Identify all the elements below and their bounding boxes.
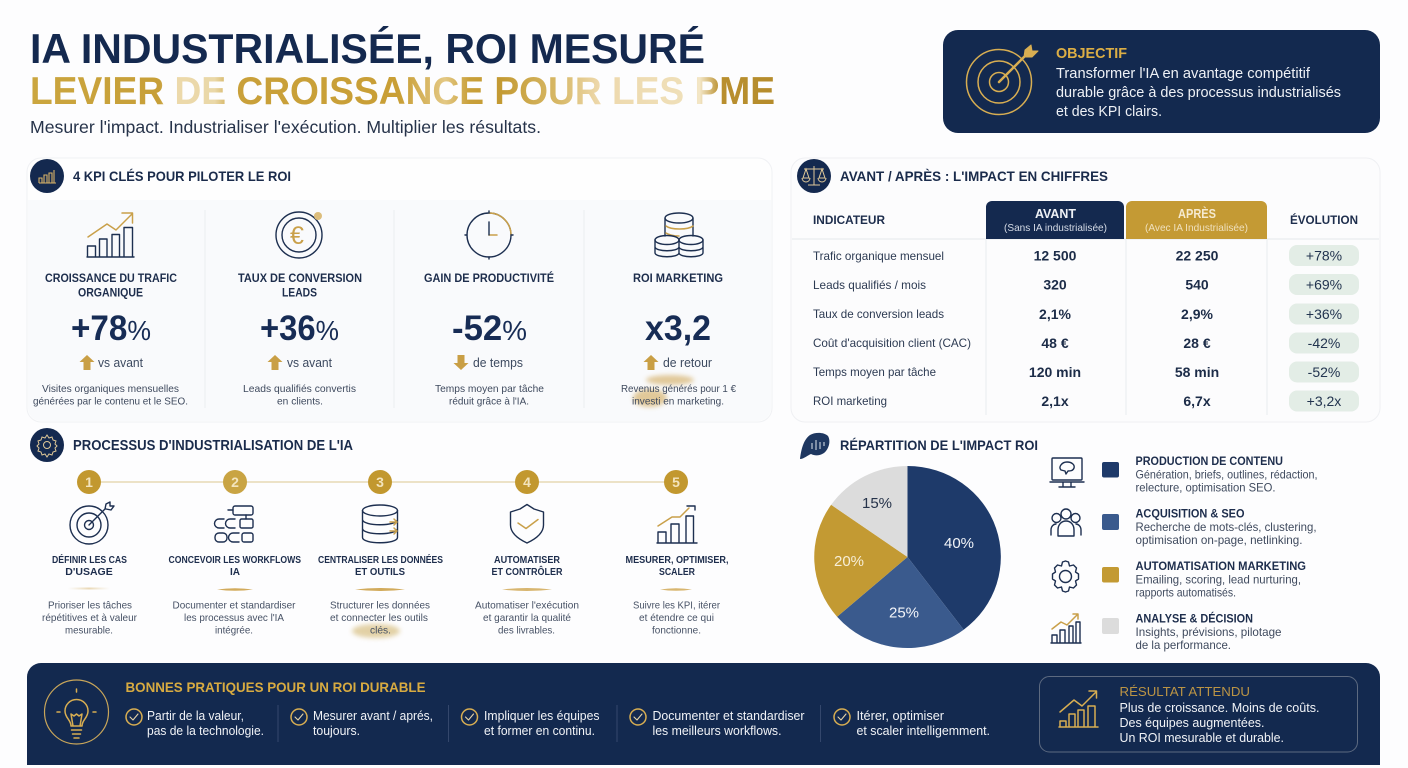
heading: processus: PROCESSUS D'INDUSTRIALISATION DE L'IA	[73, 438, 353, 454]
legend: automatisation: rapports automatisés.	[1136, 586, 1236, 600]
step 3: ET OUTILS	[355, 566, 405, 578]
step 1	[42, 470, 137, 636]
callout: résultat attendu: RÉSULTAT ATTENDU	[1120, 684, 1250, 699]
KPI: ROI	[621, 213, 736, 408]
subtitle: Mesurer l'impact. Industrialiser l'exécution. Multiplier les résultats.	[30, 117, 541, 137]
table header: (Sans IA industrialisée)	[1004, 222, 1107, 234]
icon: arrow up	[644, 355, 658, 370]
gold smear	[352, 624, 400, 638]
legend: analyse: ANALYSE & DÉCISION	[1136, 610, 1253, 626]
heading: répartition: RÉPARTITION DE L'IMPACT ROI	[840, 437, 1038, 453]
row: CAC: 48 €	[1041, 335, 1069, 351]
row: trafic: +78%	[1306, 248, 1342, 264]
practice 1	[126, 708, 264, 738]
KPI: croissance: vs avant	[98, 355, 143, 370]
step 1: Prioriser les tâches	[48, 600, 132, 612]
KPI: productivité: Temps moyen par tâche	[435, 383, 544, 395]
step 2: IA	[230, 566, 240, 578]
row: CAC	[813, 332, 1359, 354]
icon: scales	[797, 159, 831, 193]
icon: euro target	[276, 212, 322, 258]
step 2	[168, 470, 301, 636]
row: conversion: 2,1%	[1039, 306, 1072, 322]
timeline line	[89, 481, 676, 483]
table header: ÉVOLUTION	[1290, 212, 1358, 227]
step 5: fonctionne.	[652, 624, 701, 636]
step 1: 1	[85, 474, 93, 490]
practice 3: et former en continu.	[484, 723, 595, 738]
icon: répartition header	[800, 433, 829, 459]
icon: workflow	[214, 506, 253, 542]
KPI: ROI: de retour	[663, 355, 713, 370]
step 4: 4	[523, 474, 531, 490]
step 2: 2	[231, 474, 239, 490]
step 1: mesurable.	[65, 624, 113, 636]
table header: APRÈS	[1178, 206, 1216, 221]
pie chart: 20%	[834, 553, 864, 570]
row: ROI: +3,2x	[1307, 393, 1341, 409]
callout: résultat attendu	[1040, 676, 1358, 752]
step 5	[626, 470, 729, 636]
step 5: et étendre ce qui	[639, 612, 714, 624]
legend: acquisition: Recherche de mots-clés, clustering,	[1136, 520, 1316, 534]
row: leads: +69%	[1306, 276, 1342, 292]
practice 1: pas de la technologie.	[147, 723, 264, 738]
icon: light bulb	[44, 680, 108, 744]
icon: monitor	[1050, 458, 1084, 487]
step 4: ET CONTRÔLER	[492, 565, 563, 578]
icon: arrow down	[454, 355, 468, 370]
icon: arrow up	[80, 355, 94, 370]
callout: résultat attendu: Un ROI mesurable et durable.	[1120, 730, 1284, 745]
icon: euro target: €	[290, 222, 304, 250]
KPI: productivité: de temps	[473, 355, 523, 370]
KPI: conversion: en clients.	[277, 396, 323, 408]
row: leads	[813, 274, 1359, 295]
row: conversion: +36%	[1306, 306, 1342, 322]
step 3: Structurer les données	[330, 600, 430, 612]
pie chart: 40%	[944, 535, 974, 552]
panel: bonnes pratiques	[27, 663, 1380, 765]
step 4: Automatiser l'exécution	[475, 600, 579, 612]
row: temps: 120 min	[1029, 364, 1081, 380]
row: conversion	[813, 304, 1359, 324]
step 3: 3	[376, 474, 384, 490]
heading: bonnes pratiques: BONNES PRATIQUES POUR UN ROI DURABLE	[126, 679, 426, 695]
row: temps: -52%	[1308, 364, 1340, 380]
panel: avant / après	[791, 158, 1380, 422]
row: trafic: 22 250	[1176, 248, 1219, 264]
heading: avant après: AVANT / APRÈS : L'IMPACT EN CHIFFRES	[840, 168, 1108, 184]
heading: KPI: 4 KPI CLÉS POUR PILOTER LE ROI	[73, 168, 291, 184]
icon: arrow up	[268, 355, 282, 370]
gold smear	[633, 375, 694, 407]
row: leads: 320	[1043, 276, 1067, 292]
legend: automatisation	[1052, 559, 1306, 600]
legend: analyse: de la performance.	[1136, 638, 1231, 652]
KPI: productivité: -52%	[452, 309, 527, 348]
row: ROI: ROI marketing	[813, 394, 887, 408]
step 5: SCALER	[659, 566, 695, 578]
practice 2	[291, 708, 433, 738]
icon: chart	[657, 506, 697, 543]
table header	[813, 201, 1358, 239]
row: trafic: 12 500	[1034, 248, 1077, 264]
panel: objectif	[943, 30, 1380, 133]
step 1: DÉFINIR LES CAS	[52, 553, 127, 566]
practice 5	[834, 708, 990, 738]
step 3: CENTRALISER LES DONNÉES	[318, 553, 443, 566]
icon: target	[70, 502, 114, 544]
step 2: les processus avec l'IA	[184, 612, 284, 624]
practice 3	[462, 708, 600, 738]
legend: analyse: Insights, prévisions, pilotage	[1136, 625, 1282, 639]
step 1: D'USAGE	[65, 566, 113, 578]
table header: AVANT	[1035, 206, 1076, 221]
row: ROI: 6,7x	[1183, 393, 1211, 409]
icon: people	[1051, 509, 1081, 536]
step 2: Documenter et standardiser	[172, 600, 296, 612]
row: ROI	[813, 390, 1359, 412]
objectif text: Transformer l'IA en avantage compétitif	[1056, 65, 1311, 82]
practice 1: Partir de la valeur,	[147, 708, 244, 723]
icon: analytics	[1051, 614, 1081, 643]
KPI: ROI: x3,2	[645, 309, 711, 348]
legend: production	[1050, 454, 1318, 494]
step 2: CONCEVOIR LES WORKFLOWS	[168, 554, 301, 566]
legend: acquisition: ACQUISITION & SEO	[1136, 506, 1244, 520]
KPI: croissance: CROISSANCE DU TRAFIC	[45, 271, 177, 285]
icon: growth chart	[87, 213, 134, 257]
pie chart: 15%	[862, 495, 892, 512]
legend: production: relecture, optimisation SEO.	[1136, 480, 1276, 494]
panel: 4 KPI	[27, 158, 772, 422]
legend: automatisation: Emailing, scoring, lead nurturing,	[1136, 572, 1301, 586]
KPI: ROI: investi en marketing.	[632, 396, 724, 408]
KPI: conversion: TAUX DE CONVERSION	[238, 271, 362, 285]
KPI: productivité: GAIN DE PRODUCTIVITÉ	[424, 270, 554, 285]
practice 5: Itérer, optimiser	[856, 708, 945, 723]
KPI: croissance: +78%	[71, 309, 151, 348]
row: leads: 540	[1185, 276, 1209, 292]
pie chart	[814, 466, 1001, 648]
objectif text	[1056, 65, 1341, 120]
KPI: ROI: ROI MARKETING	[633, 271, 723, 285]
icon: KPI header	[30, 159, 64, 193]
icon: target	[966, 45, 1038, 114]
practice 2: toujours.	[313, 723, 360, 738]
icon: database	[362, 505, 398, 543]
panel: répartition	[800, 433, 1318, 652]
step 4: AUTOMATISER	[494, 554, 560, 566]
KPI: conversion: vs avant	[287, 355, 332, 370]
icon: clock	[465, 211, 513, 259]
title	[30, 25, 775, 113]
row: temps	[813, 362, 1359, 382]
row: conversion: Taux de conversion leads	[813, 307, 944, 321]
title: IA INDUSTRIALISÉE, ROI MESURÉ	[30, 25, 705, 72]
KPI: conversion: +36%	[260, 309, 339, 348]
legend: production: PRODUCTION DE CONTENU	[1136, 454, 1283, 468]
step 4: des livrables.	[498, 624, 555, 636]
objectif text: et des KPI clairs.	[1056, 103, 1162, 120]
step 4: et garantir la qualité	[483, 612, 571, 624]
KPI: productivité: réduit grâce à l'IA.	[449, 396, 529, 408]
row: trafic: Trafic organique mensuel	[813, 249, 944, 263]
step 5: 5	[672, 474, 680, 490]
legend: analyse	[1051, 610, 1282, 652]
KPI: conversion: Leads qualifiés convertis	[243, 383, 356, 395]
row: temps: Temps moyen par tâche	[813, 365, 936, 379]
KPI: croissance: générées par le contenu et le SEO.	[33, 396, 188, 408]
KPI: conversion: LEADS	[282, 286, 317, 300]
step 5: Suivre les KPI, itérer	[633, 600, 720, 612]
table header: INDICATEUR	[813, 213, 885, 227]
KPI: productivité	[424, 211, 554, 408]
practice 3: Impliquer les équipes	[484, 708, 600, 723]
KPI: croissance	[33, 213, 188, 408]
legend: production: Génération, briefs, outlines, rédaction,	[1136, 468, 1318, 482]
table header: (Avec IA Industrialisée)	[1145, 222, 1248, 234]
step 2: intégrée.	[215, 624, 253, 636]
KPI: croissance: Visites organiques mensuelles	[42, 383, 179, 395]
row: ROI: 2,1x	[1041, 393, 1069, 409]
row: conversion: 2,9%	[1181, 306, 1214, 322]
legend: acquisition	[1051, 506, 1316, 547]
step 3	[318, 470, 443, 638]
row: CAC: Coût d'acquisition client (CAC)	[813, 336, 971, 350]
KPI: croissance: ORGANIQUE	[78, 286, 143, 300]
icon: gear header	[30, 428, 64, 462]
objectif label: OBJECTIF	[1056, 45, 1127, 62]
practice 2: Mesurer avant / aprés,	[313, 708, 433, 723]
objectif text: durable grâce à des processus industrialisés	[1056, 84, 1341, 101]
pie chart: 25%	[889, 604, 919, 622]
step 3: et connecter les outils	[330, 612, 428, 624]
step 5: MESURER, OPTIMISER,	[626, 554, 729, 566]
callout: résultat attendu: Des équipes augmentées.	[1120, 715, 1264, 730]
legend: acquisition: optimisation on-page, netlinking.	[1136, 533, 1302, 547]
practice 4: Documenter et standardiser	[652, 708, 805, 723]
icon: gear	[1052, 561, 1078, 592]
icon: coins	[655, 213, 703, 257]
practice 4: les meilleurs workflows.	[652, 723, 782, 738]
row: CAC: 28 €	[1183, 335, 1211, 351]
icon: shield	[510, 504, 544, 543]
row: leads: Leads qualifiés / mois	[813, 278, 926, 292]
step 3: clés.	[370, 624, 391, 636]
row: CAC: -42%	[1308, 335, 1340, 351]
KPI: ROI: Revenus générés pour 1 €	[621, 383, 736, 395]
legend: automatisation: AUTOMATISATION MARKETING	[1136, 559, 1306, 573]
practice 5: et scaler intelligemment.	[856, 723, 990, 738]
step 4	[475, 470, 579, 636]
panel: processus	[30, 428, 729, 638]
practice 4	[630, 708, 805, 738]
KPI: conversion	[238, 212, 362, 408]
callout: résultat attendu: Plus de croissance. Moins de coûts.	[1120, 700, 1320, 715]
row: temps: 58 min	[1175, 364, 1219, 380]
title: LEVIER DE CROISSANCE POUR LES PME	[30, 70, 775, 113]
row: trafic	[813, 245, 1359, 266]
step 1: répétitives et à valeur	[42, 612, 137, 624]
icon: growth	[1059, 691, 1098, 727]
